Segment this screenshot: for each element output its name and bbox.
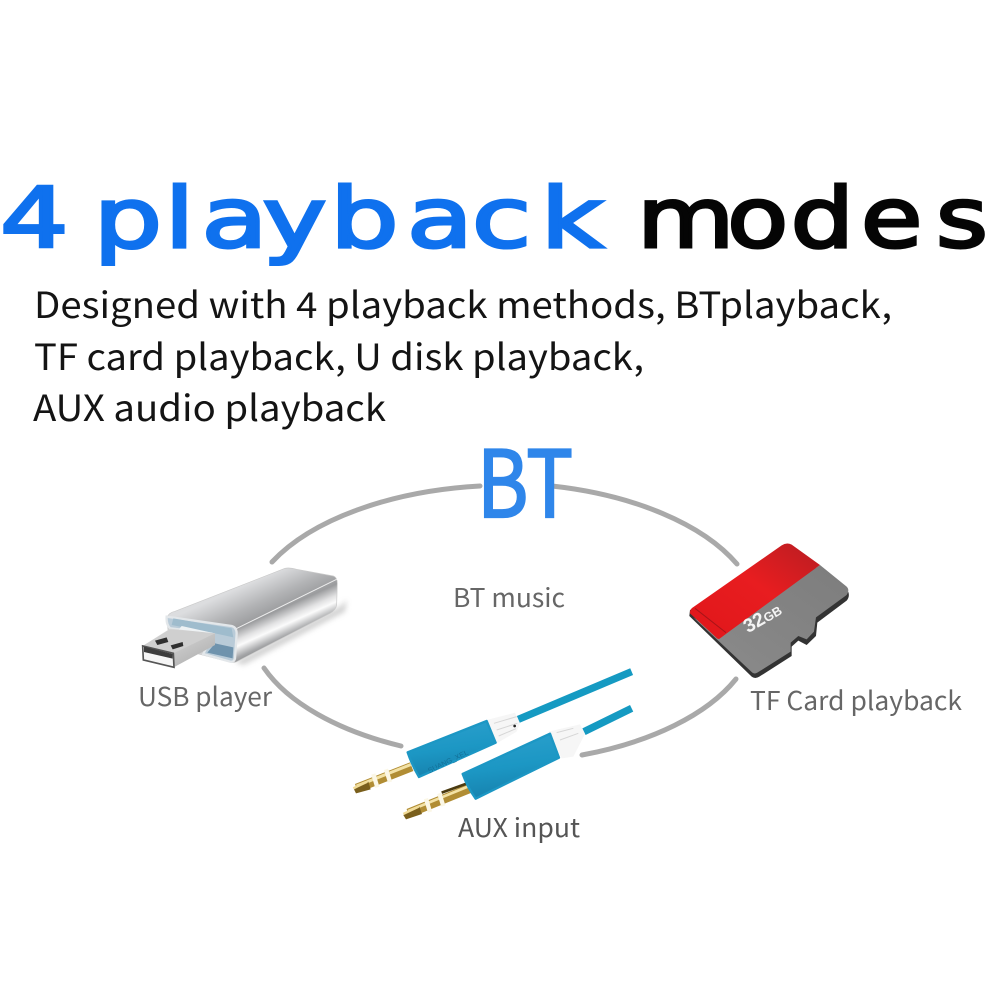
lower plug (403, 708, 632, 819)
label: AUX input: AUX input (458, 808, 580, 845)
title: blue words: 4 playback (0, 170, 604, 267)
label: USB player: USB player (138, 677, 273, 714)
BT heading: BT (477, 411, 573, 544)
description text (33, 277, 892, 432)
description text: AUX audio playback (33, 380, 386, 432)
connection ring (264, 486, 737, 755)
title (0, 170, 988, 267)
card capacity label: 32GB (740, 599, 786, 638)
label: TF Card playback: TF Card playback (750, 681, 963, 718)
icon: TF memory card (689, 543, 849, 678)
upper plug (353, 672, 632, 793)
title: black word: modes (637, 170, 988, 267)
description text: Designed with 4 playback methods, BTplayback, (34, 277, 892, 329)
icon: AUX audio cable (353, 672, 632, 819)
upper plug: SUANG_XEL (426, 748, 470, 775)
label: BT music: BT music (453, 578, 565, 615)
description text: TF card playback, U disk playback, (34, 329, 644, 381)
icon: USB flash drive (143, 568, 347, 667)
